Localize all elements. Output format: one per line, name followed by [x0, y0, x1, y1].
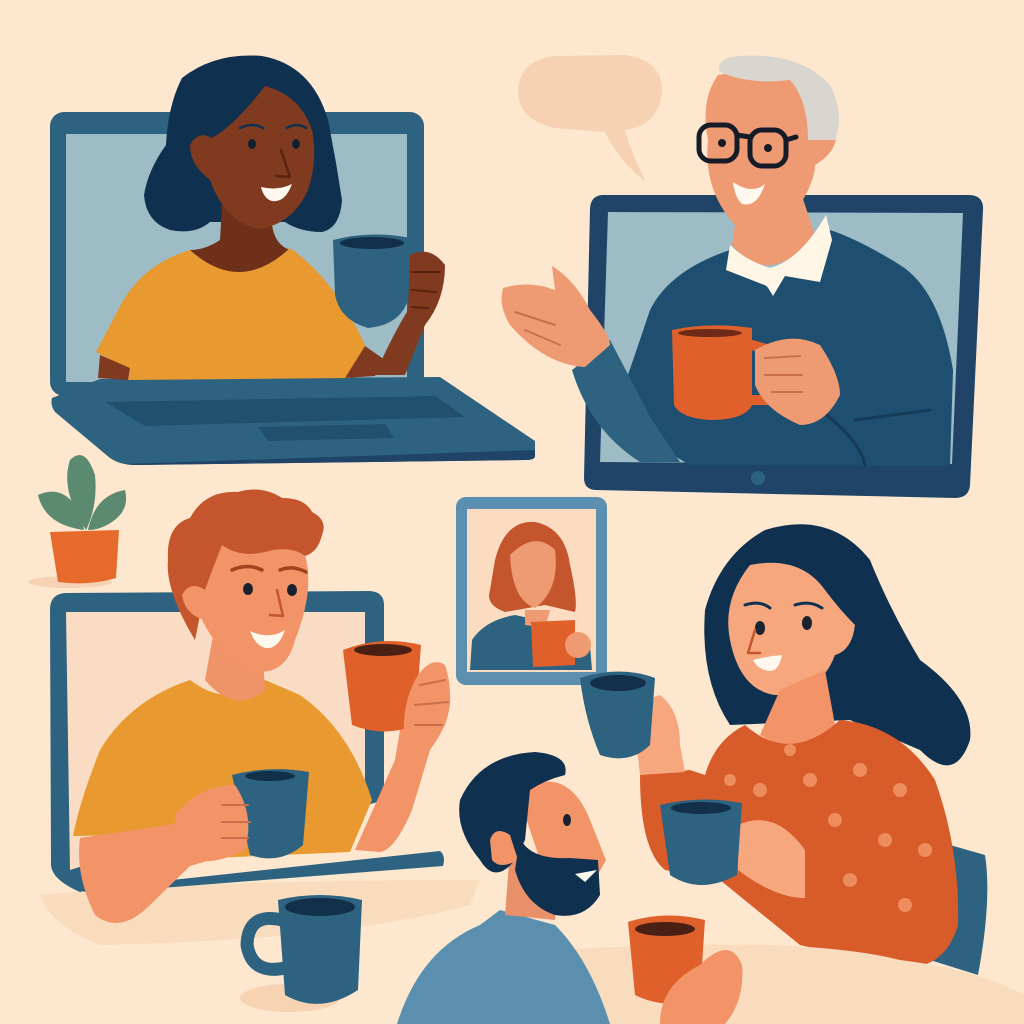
table right — [560, 944, 1024, 1024]
panel: small tablet with woman — [456, 497, 607, 685]
panel: woman on laptop — [50, 55, 535, 465]
panel: older man on tablet — [502, 56, 983, 498]
panel: woman in orange sweater — [580, 524, 987, 975]
icon: potted plant — [28, 455, 126, 588]
mug: orange held by hand — [628, 915, 742, 1024]
mug: blue on table — [240, 895, 362, 1012]
panel: young man on laptop — [50, 490, 450, 923]
panel: bearded man — [397, 752, 610, 1024]
speech bubble — [518, 55, 662, 182]
table shadow left — [40, 880, 480, 945]
